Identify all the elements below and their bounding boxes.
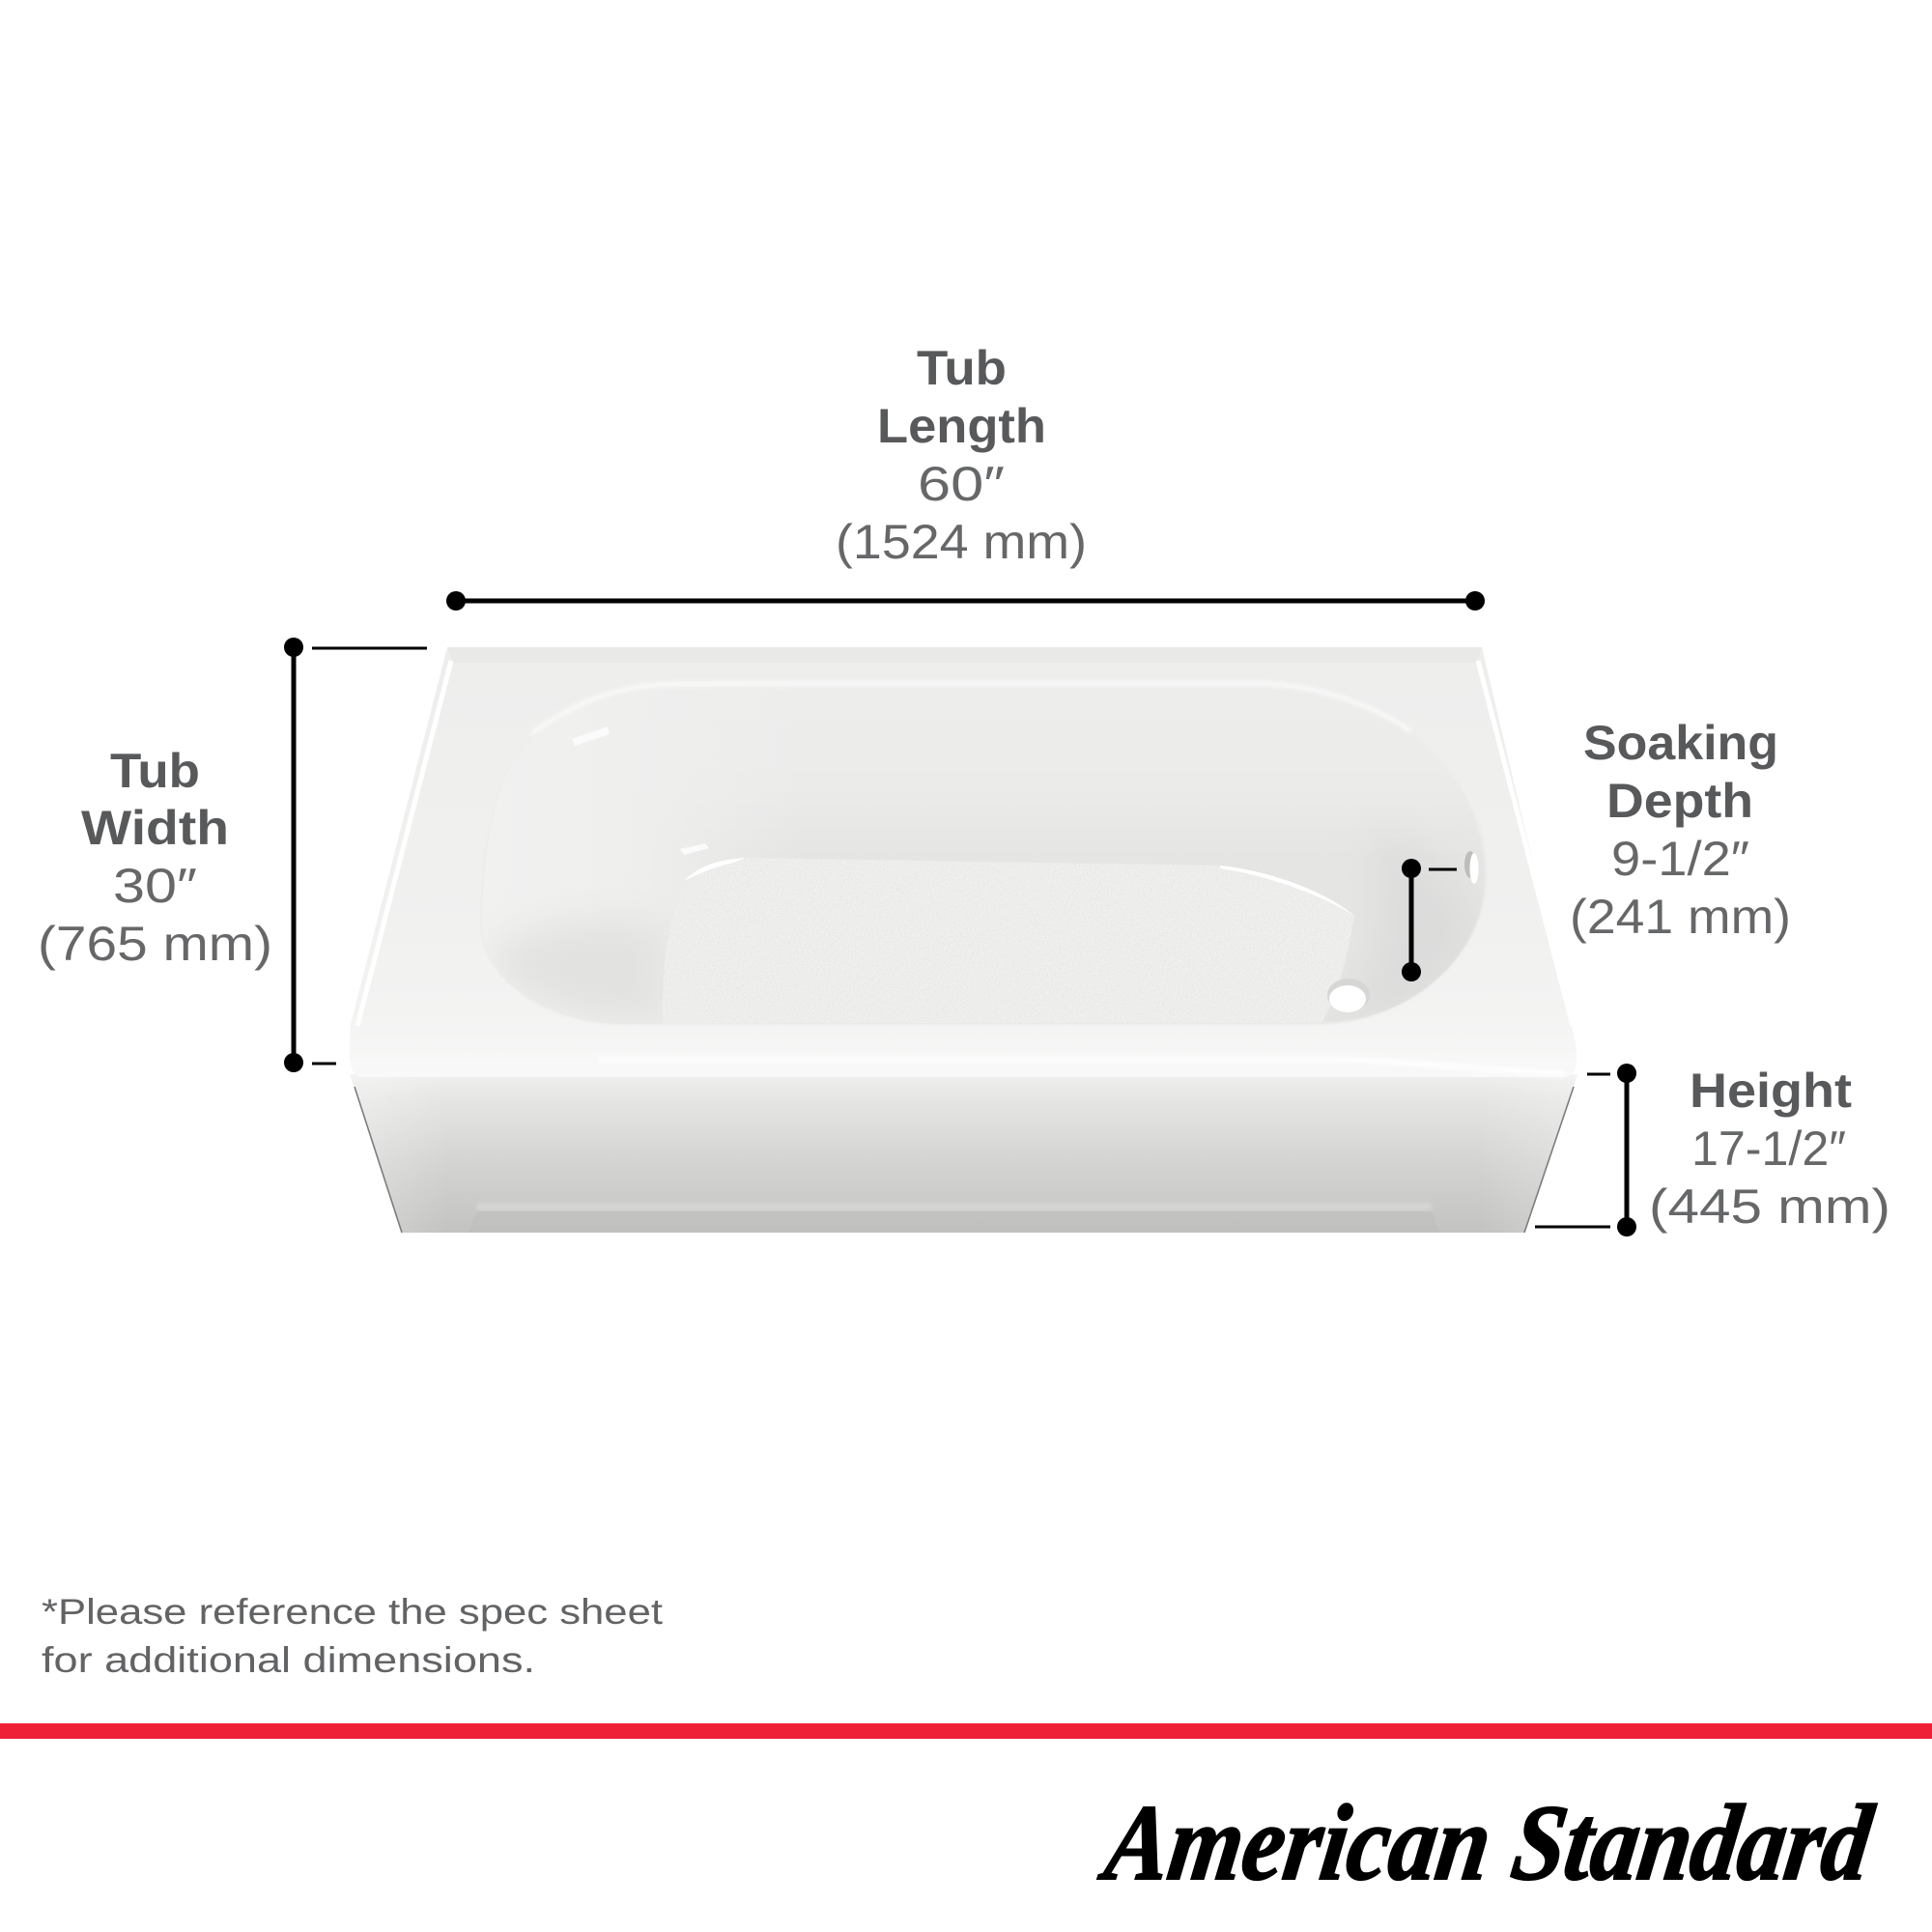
soaking depth label xyxy=(1570,716,1791,944)
red divider bar xyxy=(0,1723,1932,1739)
drain xyxy=(1327,979,1370,1012)
tub width label: Tub xyxy=(110,744,200,798)
tub length label: Length xyxy=(877,399,1046,453)
footnote: for additional dimensions. xyxy=(42,1640,535,1680)
basin rim highlight xyxy=(531,684,1410,734)
tub deck xyxy=(350,647,1577,1077)
tub length dimension line xyxy=(446,591,1485,611)
tub length label: Tub xyxy=(917,341,1007,395)
tub length label: 60″ xyxy=(918,457,1005,511)
bathtub illustration xyxy=(350,647,1577,1233)
back edge strip xyxy=(447,647,1482,663)
soaking depth dimension line xyxy=(1402,859,1457,981)
front rim highlights xyxy=(599,1060,1565,1074)
tub width label: (765 mm) xyxy=(38,917,272,971)
height label: (445 mm) xyxy=(1649,1179,1890,1234)
height label: Height xyxy=(1690,1064,1852,1118)
footnote xyxy=(42,1592,664,1680)
height label: 17-1/2″ xyxy=(1691,1122,1846,1176)
tub width dimension line xyxy=(284,638,427,1072)
soaking depth label: Depth xyxy=(1606,774,1753,828)
soaking depth label: 9-1/2″ xyxy=(1611,832,1749,886)
tub width label: 30″ xyxy=(113,859,197,913)
height label xyxy=(1649,1064,1890,1234)
basin shading xyxy=(483,813,1461,1012)
side deck edges xyxy=(357,661,1573,1026)
footnote: *Please reference the spec sheet xyxy=(42,1592,664,1632)
tub length label: (1524 mm) xyxy=(836,515,1087,569)
floor edge highlights xyxy=(684,858,1354,916)
soaking depth label: (241 mm) xyxy=(1570,890,1791,944)
tub width label xyxy=(38,744,272,971)
overflow hole xyxy=(1464,851,1478,884)
tub width label: Width xyxy=(81,801,229,855)
basin xyxy=(482,683,1486,1024)
infographic canvas xyxy=(0,350,1932,1882)
tub length label xyxy=(836,341,1087,569)
textured floor xyxy=(663,858,1354,1023)
tub front panel xyxy=(350,1074,1577,1233)
glare marks xyxy=(572,726,709,855)
soaking depth label: Soaking xyxy=(1583,716,1778,770)
height dimension line xyxy=(1535,1064,1636,1236)
